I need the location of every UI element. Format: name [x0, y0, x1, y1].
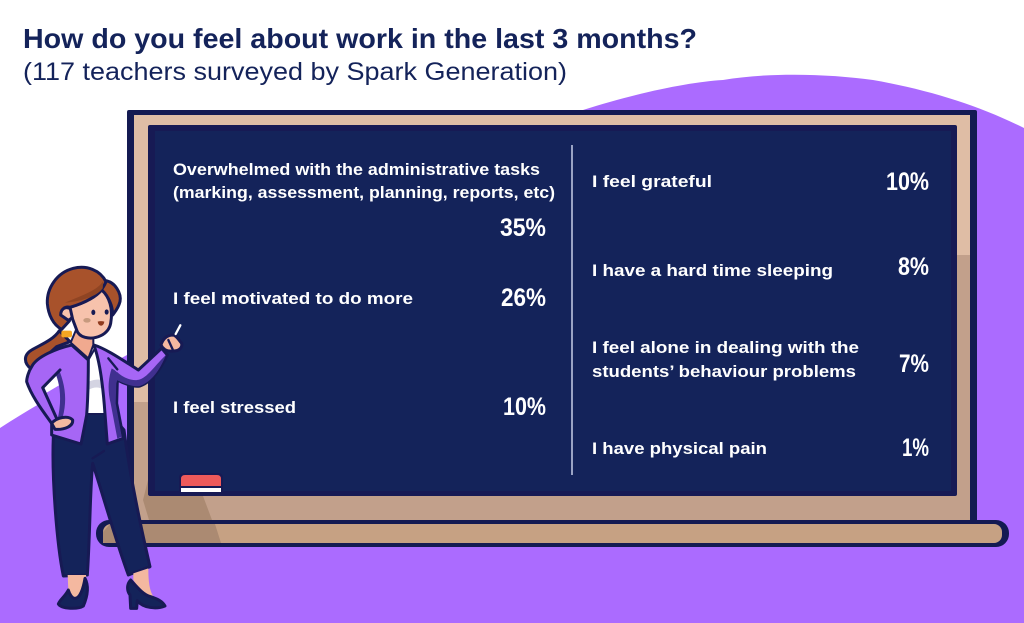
white background seen through gap: [44, 373, 61, 393]
torso: [27, 345, 167, 444]
mouth: [98, 321, 104, 326]
item: grateful 10%: 10%: [886, 168, 929, 196]
item: overwhelmed 35%: [173, 161, 555, 242]
shoes: [58, 578, 165, 608]
column divider: [571, 145, 573, 475]
cheek: [83, 318, 91, 323]
item: motivated 26%: 26%: [501, 284, 546, 312]
item: alone 7%: 7%: [899, 350, 929, 378]
item: alone 7%: [592, 339, 929, 381]
item: overwhelmed 35%: Overwhelmed with the administrative tasks: [173, 161, 540, 179]
head: [47, 267, 120, 338]
left column results: [173, 161, 555, 421]
item: stressed 10%: I feel stressed: [173, 399, 296, 417]
neck: [71, 328, 93, 358]
item: stressed 10%: 10%: [503, 393, 546, 421]
trouser crease: [93, 451, 104, 458]
teacher illustration: [25, 267, 182, 608]
ear: [60, 308, 73, 320]
gap between arm and body: [43, 371, 63, 419]
board outer frame: [127, 110, 977, 524]
item: physical pain 1%: 1%: [902, 434, 929, 462]
eyes: [91, 309, 109, 315]
hand on hip: [52, 417, 73, 429]
item: sleeping 8%: I have a hard time sleeping: [592, 262, 833, 280]
chalkboard surface: [148, 125, 957, 496]
subtitle: (117 teachers surveyed by Spark Generation): [23, 58, 567, 86]
back hair: [102, 281, 120, 315]
inner arm outline: [43, 370, 60, 420]
hair highlight: [65, 281, 103, 303]
item: stressed 10%: [173, 393, 546, 421]
ponytail: [25, 331, 70, 369]
item: overwhelmed 35%: 35%: [500, 214, 546, 242]
item: sleeping 8%: [592, 253, 929, 281]
jacket left side: [27, 345, 88, 444]
pointing hand: [161, 335, 182, 351]
lapel line: [108, 358, 117, 369]
finger: [168, 340, 173, 349]
item: motivated 26%: I feel motivated to do more: [173, 290, 413, 308]
item: physical pain 1%: I have physical pain: [592, 440, 767, 458]
torso shading: [109, 368, 122, 439]
item: sleeping 8%: 8%: [898, 253, 929, 281]
trousers: [53, 410, 150, 576]
face: [70, 290, 111, 338]
item: physical pain 1%: [592, 434, 929, 462]
item: overwhelmed 35%: (marking, assessment, planning, reports, etc): [173, 184, 555, 202]
right column results: [592, 168, 929, 462]
item: alone 7%: students’ behaviour problems: [592, 363, 856, 381]
item: grateful 10%: [592, 168, 929, 196]
ankles and skin: [68, 568, 155, 598]
item: grateful 10%: I feel grateful: [592, 173, 712, 191]
board tray: [96, 520, 1009, 547]
scrunchie: [61, 331, 72, 337]
item: alone 7%: I feel alone in dealing with the: [592, 339, 859, 357]
shirt shading: [88, 379, 104, 390]
item: motivated 26%: [173, 284, 546, 312]
chalk: [176, 325, 180, 334]
icon: eraser: [179, 473, 223, 493]
shirt: [75, 348, 105, 414]
chalkboard: [96, 110, 1009, 547]
arm shading: [117, 355, 166, 386]
inner jacket shading: [56, 371, 65, 420]
title: How do you feel about work in the last 3 months?: [23, 23, 697, 54]
jacket right side and arm: [94, 345, 167, 444]
main hair: [47, 267, 106, 329]
